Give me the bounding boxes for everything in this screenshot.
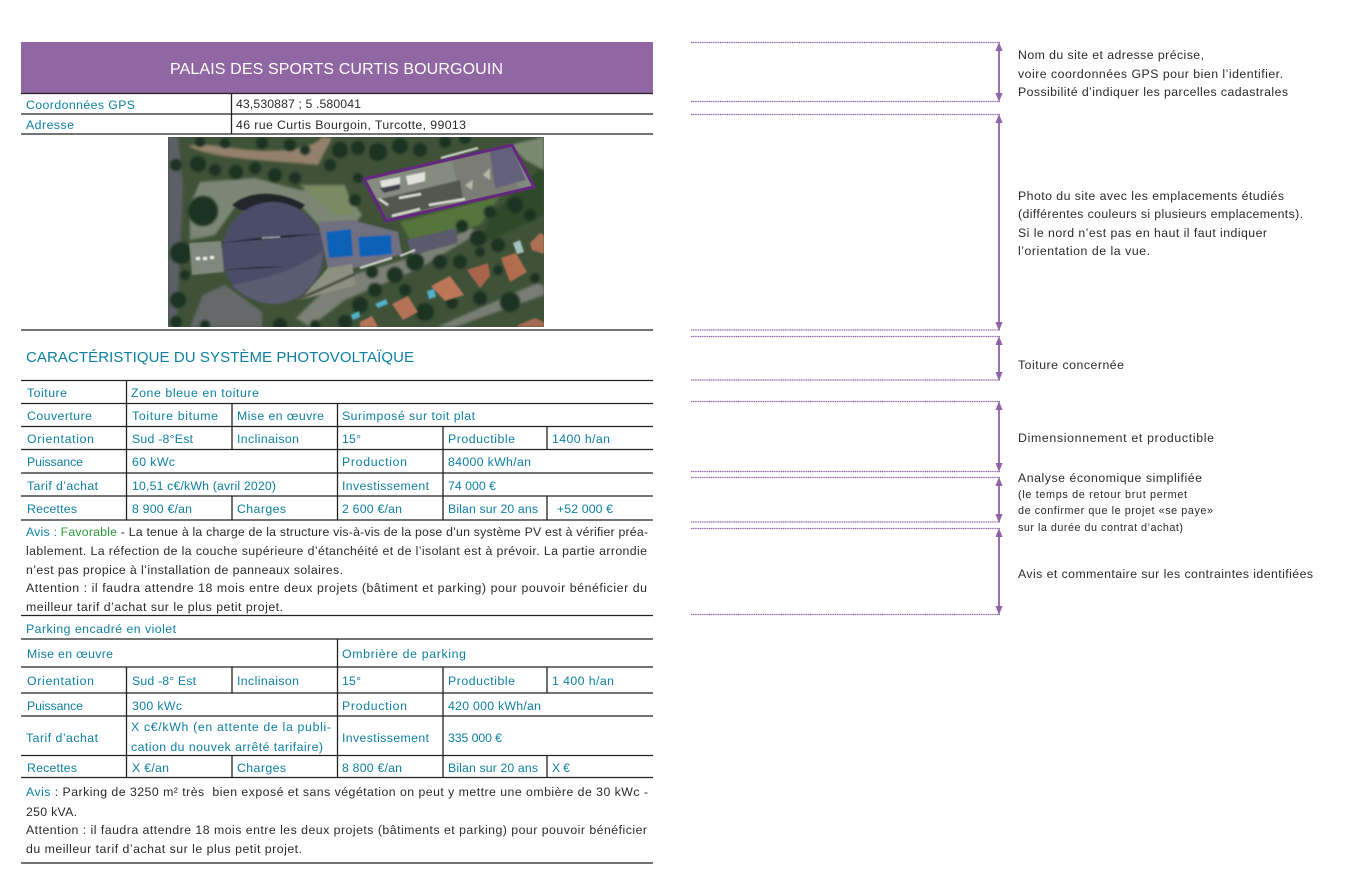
parking table: X €: [552, 761, 570, 775]
rooftop system table: Mise en œuvre: [237, 409, 324, 423]
parking table: Orientation: [27, 674, 94, 688]
annotation text: economic analysis: [1018, 471, 1213, 534]
rooftop opinion text: Avis : Favorable - La tenue à la charge de la structure vis-à-vis de la pose d’un système PV est à vérifier préa-: [26, 525, 648, 539]
rooftop system table: Puissance: [27, 455, 83, 469]
annotation text: site photo: (différentes couleurs si plusieurs emplacements).: [1018, 207, 1303, 221]
rooftop system table: 8 900 €/an: [132, 502, 192, 516]
rooftop system table: Charges: [237, 502, 286, 516]
rooftop opinion text: Attention : il faudra attendre 18 mois entre deux projets (bâtiment et parking) pour pouvoir bénéficier du: [26, 581, 647, 595]
parking table: Sud -8° Est: [132, 674, 197, 688]
annotation text: site photo: l’orientation de la vue.: [1018, 244, 1150, 258]
parking table: X €/an: [132, 761, 169, 775]
parking table: Puissance: [27, 699, 83, 713]
parking table: [21, 639, 653, 778]
parking area inside violet frame: [366, 152, 532, 218]
parking opinion text: Avis : Parking de 3250 m² très bien exposé et sans végétation on peut y mettre une ombière de 30 kWc -: [26, 785, 648, 799]
parking table: 420 000 kWh/an: [448, 699, 541, 713]
rooftop system table: 15°: [342, 432, 361, 446]
houses: [501, 253, 527, 282]
section heading: CARACTÉRISTIQUE DU SYSTÈME PHOTOVOLTAÏQUE: [26, 349, 414, 366]
rooftop opinion text: meilleur tarif d’achat sur le plus petit projet.: [26, 600, 283, 614]
annotation text: economic analysis: Analyse économique simplifiée: [1018, 471, 1202, 485]
rooftop system table: Toiture bitume: [132, 409, 218, 423]
dome roof: [232, 194, 305, 210]
parking table: X c€/kWh (en attente de la publi-: [131, 720, 331, 734]
site identification table: 46 rue Curtis Bourgoin, Turcotte, 99013: [236, 118, 466, 132]
title banner: [21, 42, 653, 93]
rooftop system table: 10,51 c€/kWh (avril 2020): [132, 479, 276, 493]
parking table: 1 400 h/an: [552, 674, 614, 688]
rooftop system table: Bilan sur 20 ans: [448, 502, 538, 516]
parking table: Inclinaison: [237, 674, 299, 688]
lower-right parking: [407, 228, 458, 255]
parking table: 300 kWc: [132, 699, 182, 713]
parking opinion text: du meilleur tarif d’achat sur le plus petit projet.: [26, 842, 302, 856]
pool building: [318, 220, 402, 270]
parking table: Charges: [237, 761, 286, 775]
rooftop system table: +52 000 €: [557, 502, 613, 516]
parking opinion text: 250 kVA.: [26, 805, 77, 819]
parking table: Bilan sur 20 ans: [448, 761, 538, 775]
parking table: Tarif d’achat: [26, 731, 99, 745]
parking table: Ombrière de parking: [342, 647, 466, 661]
annotation text: site photo: Si le nord n’est pas en haut il faut indiquer: [1018, 226, 1267, 240]
rooftop system table: Toiture: [27, 386, 67, 400]
annotation text: economic analysis: (le temps de retour brut permet: [1018, 489, 1187, 501]
annotation text: site name: [1018, 48, 1288, 99]
annotation bracket: site name: [691, 42, 1002, 102]
annotation bracket: comments: [691, 528, 1002, 615]
rooftop system table: Zone bleue en toiture: [131, 386, 259, 400]
rooftop opinion text: [26, 525, 648, 614]
parking table: Investissement: [342, 731, 430, 745]
rooftop system table: 74 000 €: [448, 479, 496, 493]
rooftop system table: Sud -8°Est: [132, 432, 194, 446]
rooftop system table: Surimposé sur toit plat: [342, 409, 476, 423]
low building: [189, 241, 224, 275]
site identification table: Adresse: [26, 118, 74, 132]
title banner: PALAIS DES SPORTS CURTIS BOURGOUIN: [170, 61, 503, 78]
annotation bracket: economic analysis: [691, 477, 1002, 523]
rooftop system table: Tarif d’achat: [27, 479, 99, 493]
parking table: Recettes: [27, 761, 77, 775]
violet study outline: [364, 145, 534, 221]
parking table: 8 800 €/an: [342, 761, 402, 775]
annotation text: economic analysis: sur la durée du contrat d’achat): [1018, 522, 1183, 534]
parking opinion text: [21, 785, 653, 863]
rooftop system table: Recettes: [27, 502, 77, 516]
annotation text: sizing: Dimensionnement et productible: [1018, 431, 1214, 445]
parking table: Production: [342, 699, 407, 713]
parking opinion text: Attention : il faudra attendre 18 mois entre les deux projets (bâtiments et parking) pour pouvoir bénéficier: [26, 823, 647, 837]
rooftop system table: Inclinaison: [237, 432, 299, 446]
roads and open ground: [168, 137, 183, 327]
rooftop system table: Investissement: [342, 479, 430, 493]
parking table: 15°: [342, 674, 361, 688]
rooftop system table: Couverture: [27, 409, 92, 423]
rooftop system table: 1400 h/an: [552, 432, 610, 446]
annotation text: economic analysis: de confirmer que le projet «se paye»: [1018, 505, 1213, 517]
rooftop system table: 60 kWc: [132, 455, 175, 469]
rooftop opinion text: lablement. La réfection de la couche supérieure d’étanchéité et de l’isolant est à prévoir. La partie arrondie: [26, 544, 647, 558]
annotation text: site photo: Photo du site avec les emplacements étudiés: [1018, 189, 1284, 203]
rooftop system table: Productible: [448, 432, 515, 446]
rooftop system table: 2 600 €/an: [342, 502, 402, 516]
site identification table: [21, 93, 653, 134]
tree canopy: [188, 196, 218, 226]
annotation text: site photo: [1018, 189, 1303, 258]
parking table: Mise en œuvre: [27, 647, 113, 661]
annotation text: site name: Nom du site et adresse précise,: [1018, 48, 1204, 62]
parking subheading: Parking encadré en violet: [26, 622, 177, 636]
rooftop system table: 84000 kWh/an: [448, 455, 531, 469]
rooftop system table: Orientation: [27, 432, 94, 446]
rooftop system table: [21, 380, 653, 520]
site identification table: Coordonnées GPS: [26, 98, 135, 112]
annotation text: roof concerned: Toiture concernée: [1018, 358, 1124, 372]
annotation text: site name: Possibilité d’indiquer les parcelles cadastrales: [1018, 85, 1288, 99]
annotation text: site name: voire coordonnées GPS pour bien l’identifier.: [1018, 67, 1283, 81]
annotation bracket: site photo: [691, 114, 1002, 331]
annotation bracket: roof concerned: [691, 336, 1002, 381]
site identification table: 43,530887 ; 5 .580041: [236, 97, 361, 111]
annotation text: comments: Avis et commentaire sur les contraintes identifiées: [1018, 567, 1313, 581]
parking table: cation du nouvek arrêté tarifaire): [131, 740, 323, 754]
parking table: 335 000 €: [448, 731, 502, 745]
annotation bracket: sizing: [691, 401, 1002, 472]
rooftop system table: Production: [342, 455, 407, 469]
aerial photo of the site: [168, 132, 544, 332]
parking table: Productible: [448, 674, 515, 688]
rooftop opinion text: n’est pas propice à l’installation de panneaux solaires.: [26, 563, 343, 577]
